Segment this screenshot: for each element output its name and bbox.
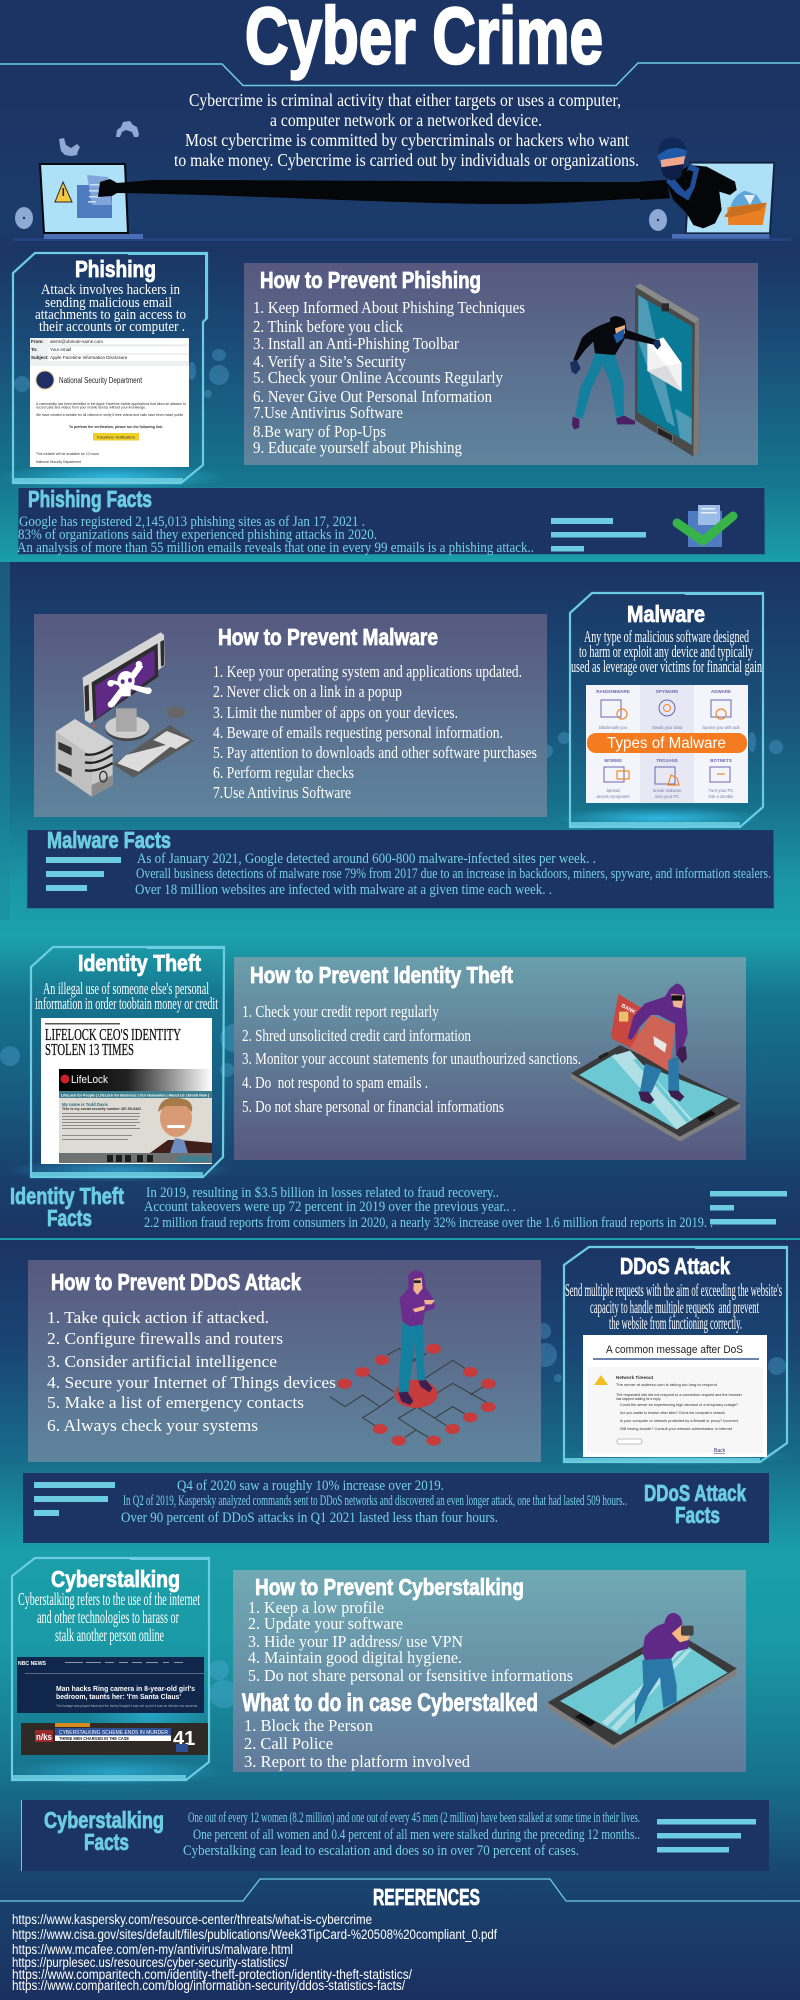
description: [565, 1280, 782, 1333]
dos message screenshot: A common message after DoS: [606, 1344, 743, 1356]
facts text: One percent of all women and 0.4 percent of all men were stalked during the preceding 12 months..: [193, 1827, 640, 1843]
references list: https://www.comparitech.com/blog/information-security/ddos-statistics-facts/: [12, 1978, 405, 1993]
lifelock article screenshot: My name is Todd Davis: [62, 1102, 109, 1107]
list: 3. Consider artificial intelligence: [47, 1352, 277, 1371]
description: information in order toobtain money or credit: [35, 994, 218, 1013]
types of malware chart: Spams you with ads: [702, 725, 740, 730]
list: 4. Verify a Site’s Security: [253, 352, 406, 371]
heading: DDoS Attack: [620, 1253, 730, 1279]
panel: malware: [555, 592, 765, 829]
phishing email screenshot: Apple Facetime Information Disclosure: [50, 355, 128, 360]
description: and other technologies to harass or: [37, 1607, 179, 1627]
intro text: to make money. Cybercrime is carried out by individuals or organizations.: [174, 150, 639, 170]
illustration: hacker at tablet: [570, 283, 699, 457]
news broadcast screenshot: n/ks: [36, 1732, 52, 1742]
panel: ddos facts: [23, 1473, 769, 1543]
types of malware chart: Steals your data: [652, 725, 683, 730]
panel: cyberstalking facts: [21, 1800, 769, 1871]
illustration: stalker with camera on phone: [548, 1613, 737, 1750]
list: [248, 1598, 573, 1685]
dos message screenshot: Are you unable to browse other sites? Check the computer's network: [620, 1411, 725, 1415]
facts text: Q4 of 2020 saw a roughly 10% increase over 2019.: [177, 1478, 444, 1494]
heading: Phishing: [75, 256, 156, 282]
description: [35, 979, 218, 1013]
description: attachments to gain access to: [35, 307, 186, 323]
long arm: [98, 179, 668, 204]
heading: Identity Theft: [78, 950, 201, 976]
list: 1. Take quick action if attacked.: [47, 1308, 269, 1327]
list: 3. Hide your IP address/ use VPN: [248, 1632, 463, 1651]
heading: Malware Facts: [47, 827, 171, 853]
facts text: In 2019, resulting in $3.5 billion in losses related to fraud recovery..: [146, 1185, 499, 1201]
list: [253, 298, 525, 457]
list: 1. Keep your operating system and applications updated.: [213, 662, 522, 681]
types of malware chart: WORMS: [604, 758, 622, 763]
description: stalk another person online: [55, 1625, 164, 1645]
lifelock article screenshot: This is my social security number 457-55-5462: [62, 1107, 141, 1111]
types of malware chart: SPYWARE: [656, 689, 678, 694]
heading: How to Prevent DDoS Attack: [51, 1269, 301, 1295]
panel: how to prevent cyberstalking: [233, 1570, 746, 1772]
panel: identity theft facts: Facts: [47, 1205, 92, 1231]
icon: gears: [15, 121, 667, 231]
list: 5. Do not share personal or fsensitive informations: [248, 1666, 573, 1685]
list: 6. Never Give Out Personal Information: [253, 387, 492, 406]
nbc news screenshot: bedroom, taunts her: 'I'm Santa Claus': [56, 1694, 181, 1701]
facts text: As of January 2021, Google detected around 600-800 malware-infected sites per week. .: [137, 851, 596, 867]
nbc news screenshot: [17, 1657, 204, 1713]
phishing email screenshot: National Security Department: [36, 460, 81, 464]
heading: Cyberstalking: [51, 1566, 180, 1592]
facts text: [121, 1478, 627, 1526]
list: [244, 1716, 470, 1771]
lifelock article screenshot: LIFELOCK CEO'S IDENTITY: [45, 1025, 181, 1044]
phishing email screenshot: [30, 338, 189, 467]
heading: How to Prevent Phishing: [260, 267, 481, 293]
panel: cyberstalking: [5, 1557, 225, 1786]
nbc news screenshot: NBC NEWS: [18, 1661, 46, 1667]
bars: [46, 857, 121, 891]
heading: What to do in case Cyberstalked: [242, 1689, 538, 1717]
list: 3. Monitor your account statements for unauthourized sanctions.: [242, 1049, 581, 1068]
references list: https://www.comparitech.com/identity-theft-protection/identity-theft-statistics/: [12, 1967, 412, 1982]
panel: identity theft: [5, 946, 235, 1182]
illustration: thief with credit card on phone: BANK: [620, 1003, 637, 1016]
bars: [710, 1191, 787, 1224]
facts text: Over 90 percent of DDoS attacks in Q1 2021 lasted less than four hours.: [121, 1510, 498, 1526]
types of malware chart: ADWARE: [711, 689, 731, 694]
decorative bubbles: [0, 349, 786, 1708]
thief and right laptop: [640, 137, 774, 239]
lifelock article screenshot: LifeLock for People | LifeLock for Business | Our Guarantee | About Us | Enroll Now |: [61, 1094, 209, 1098]
description: [571, 627, 762, 676]
heading: How to Prevent Cyberstalking: [255, 1574, 524, 1600]
description: Attack involves hackers in: [41, 282, 180, 298]
types of malware chart: onto your PC: [655, 794, 679, 799]
list: 2. Shred unsolicited credit card information: [242, 1026, 471, 1045]
dos message screenshot: Back: [714, 1448, 726, 1454]
news broadcast screenshot: CYBERSTALKING SCHEME ENDS IN MURDER: [59, 1730, 168, 1736]
phishing email screenshot: From:: [31, 339, 44, 344]
list: [47, 1308, 336, 1435]
heading: Cyberstalking: [44, 1807, 164, 1833]
list: 4. Maintain good digital hygiene.: [248, 1648, 462, 1667]
dos message screenshot: Still having trouble? Consult your network administrator or internet: [620, 1427, 732, 1431]
dos message screenshot: has stopped waiting for a reply.: [616, 1397, 661, 1401]
facts text: Google has registered 2,145,013 phishing sites as of Jan 17, 2021 .: [19, 514, 365, 530]
intro text: a computer network or a networked device.: [270, 110, 542, 130]
phishing email screenshot: A vulnerability has been identified in the Apple Facetime mobile applications that allow an attacker to: [36, 402, 186, 406]
facts text: [135, 851, 771, 898]
phishing email screenshot: alerts@ubmute-same.com: [50, 339, 103, 344]
list: 3. Install an Anti-Phishing Toolbar: [253, 334, 459, 353]
facts text: 83% of organizations said they experienced phishing attacks in 2020.: [18, 527, 377, 543]
list: 2. Update your software: [248, 1614, 403, 1633]
phishing email screenshot: To perform the verification, please run the following link:: [69, 425, 163, 429]
description: [35, 282, 186, 335]
list: 7.Use Antivirus Software: [253, 403, 403, 422]
news broadcast screenshot: THREE MEN CHARGED IN THE CASE: [59, 1736, 129, 1741]
references list: https://purplesec.us/resources/cyber-security-statistics/: [12, 1955, 288, 1970]
laptop left: [40, 164, 143, 239]
types of malware chart: Turn your PC: [709, 788, 733, 793]
list: 2. Think before you click: [253, 317, 403, 336]
dos message screenshot: The requested site did not respond to a connection request and the browser: [616, 1393, 743, 1397]
bars: [657, 1819, 756, 1852]
bars: [551, 518, 646, 552]
references list: [12, 1912, 497, 1993]
panel: ddos attack: [564, 1246, 795, 1466]
panel: phishing: [0, 252, 227, 491]
list: 1. Keep a low profile: [248, 1598, 384, 1617]
panel: how to prevent ddos: [28, 1260, 541, 1462]
phishing email screenshot: To:: [31, 347, 38, 352]
list: 4. Beware of emails requesting personal information.: [213, 723, 503, 742]
types of malware chart: across computers: [596, 794, 630, 799]
illustration: network attacker: [330, 1270, 496, 1446]
references list: https://www.cisa.gov/sites/default/files/publications/Week3TipCard-%20508%20compliant_0.pdf: [12, 1927, 497, 1942]
types of malware chart: into a zombie: [709, 794, 734, 799]
dos message screenshot: Could the server be experiencing high demand or a temporary outage?: [620, 1403, 738, 1407]
nbc news screenshot: Man hacks Ring camera in 8-year-old girl's: [56, 1686, 195, 1693]
dos message screenshot: Network Timeout: [616, 1375, 654, 1380]
facts text: Over 18 million websites are infected with malware at a given time each week. .: [135, 882, 552, 898]
dos message screenshot: [583, 1335, 767, 1457]
list: 1. Block the Person: [244, 1716, 373, 1735]
list: 6. Perform regular checks: [213, 763, 354, 782]
heading: DDoS Attack: [644, 1480, 746, 1506]
dos message screenshot: The server at address.com is taking too long to respond.: [616, 1383, 718, 1387]
list: 5. Make a list of emergency contacts: [47, 1393, 304, 1412]
hero illustration: hacker reaching into laptop: [13, 121, 791, 241]
list: 8.Be wary of Pop-Ups: [253, 422, 386, 441]
list: 2. Configure firewalls and routers: [47, 1329, 283, 1348]
panel: cyberstalking facts: Facts: [84, 1829, 129, 1855]
references heading: REFERENCES: [373, 1884, 480, 1910]
facts text: [17, 514, 534, 556]
panel: how to prevent phishing: [244, 263, 758, 465]
ground line: [13, 238, 791, 241]
facts text: Account takeovers were up 72 percent in 2019 over the previous year.. .: [144, 1199, 516, 1215]
facts text: [144, 1185, 713, 1231]
phishing email screenshot: record calls and videos from your mobile device without your knowledge.: [36, 406, 146, 410]
types of malware chart: Blackmails you: [599, 725, 628, 730]
description: sending malicious email: [45, 295, 172, 311]
facts text: Cyberstalking can lead to escalation and does so in over 70 percent of cases.: [183, 1843, 579, 1859]
references list: https://www.kaspersky.com/resource-center/threats/what-is-cybercrime: [12, 1912, 372, 1927]
phishing email screenshot: National Security Department: [59, 376, 143, 385]
list: 2. Call Police: [244, 1734, 333, 1753]
heading: Phishing Facts: [28, 486, 152, 512]
panel: identity theft facts: [10, 1183, 787, 1231]
phishing email screenshot: Your email: [50, 347, 71, 352]
list: 3. Limit the number of apps on your devices.: [213, 703, 458, 722]
heading: How to Prevent Malware: [218, 624, 438, 650]
intro text: Most cybercrime is committed by cybercriminals or hackers who want: [185, 130, 629, 150]
types of malware chart: Spread: [606, 788, 620, 793]
nbc news screenshot: The footage was played back and the family thought it was set up but it was an intruder via cameras.: [56, 1704, 198, 1708]
phishing email screenshot: Subject:: [31, 355, 49, 360]
types of malware chart: TROJANS: [656, 758, 678, 763]
types of malware chart: BOTNETS: [710, 758, 732, 763]
types of malware chart: Sneak malware: [653, 788, 682, 793]
panel: how to prevent malware: [34, 614, 547, 817]
lifelock article screenshot: STOLEN 13 TIMES: [45, 1040, 134, 1059]
list: 3. Report to the platform involved: [244, 1752, 470, 1771]
panel: phishing facts: [17, 486, 765, 556]
list: 5. Check your Online Accounts Regularly: [253, 368, 503, 387]
list: 4. Do not respond to spam emails .: [242, 1073, 428, 1092]
list: [213, 662, 537, 802]
list: 7.Use Antivirus Software: [213, 783, 351, 802]
intro text: [174, 90, 639, 170]
list: 9. Educate yourself about Phishing: [253, 438, 462, 457]
list: 1. Check your credit report regularly: [242, 1002, 439, 1021]
description: their accounts or computer .: [39, 319, 185, 335]
list: 5. Pay attention to downloads and other software purchases: [213, 743, 537, 762]
phishing email screenshot: This website will be available for 12 hours: [36, 452, 99, 456]
phishing email screenshot: Facetime Verification: [97, 434, 135, 440]
description: An illegal use of someone else's personal: [43, 979, 209, 998]
heading: Identity Theft: [10, 1183, 124, 1209]
news broadcast screenshot: 41: [173, 1728, 195, 1750]
phishing email screenshot: We have created a website for all citizens to verify if their videos and calls have been made public.: [36, 413, 184, 417]
list: 2. Never click on a link in a popup: [213, 682, 402, 701]
list: 5. Do not share personal or financial informations: [242, 1097, 504, 1116]
panel: ddos facts: Facts: [675, 1502, 720, 1528]
intro text: Cybercrime is criminal activity that either targets or uses a computer,: [189, 90, 621, 110]
list: 6. Always check your systems: [47, 1416, 258, 1435]
icon: folder with check: [677, 505, 733, 547]
lifelock article screenshot: LifeLock: [71, 1074, 108, 1086]
facts text: [183, 1810, 640, 1859]
references list: https://www.mcafee.com/en-my/antivirus/malware.html: [12, 1942, 293, 1957]
list: 1. Keep Informed About Phishing Techniques: [253, 298, 525, 317]
news broadcast screenshot: [21, 1723, 208, 1755]
references frame line: [0, 1879, 800, 1901]
panel: malware facts: [27, 827, 774, 908]
list: [242, 1002, 581, 1116]
types of malware chart: RANSOMWARE: [596, 689, 630, 694]
types of malware chart: Types of Malware: [607, 735, 726, 752]
illustration: infected computer: [56, 632, 194, 797]
header frame line: [0, 63, 800, 86]
description: [18, 1589, 200, 1645]
dos message screenshot: Is your computer or network protected by a firewall or proxy? Incorrect: [620, 1419, 738, 1423]
panel: how to prevent identity theft: [234, 957, 746, 1160]
lifelock article screenshot: [41, 1018, 212, 1164]
heading: How to Prevent Identity Theft: [250, 962, 513, 988]
illustration: thief with credit card on phone: [571, 983, 740, 1142]
description: Cyberstalking refers to the use of the internet: [18, 1589, 200, 1609]
bars: [34, 1482, 115, 1516]
list: 4. Secure your Internet of Things devices: [47, 1373, 336, 1392]
heading: Malware: [627, 601, 705, 627]
facts text: An analysis of more than 55 million emails reveals that one in every 99 emails is a phishing attack..: [17, 540, 534, 556]
types of malware chart: [586, 685, 748, 803]
